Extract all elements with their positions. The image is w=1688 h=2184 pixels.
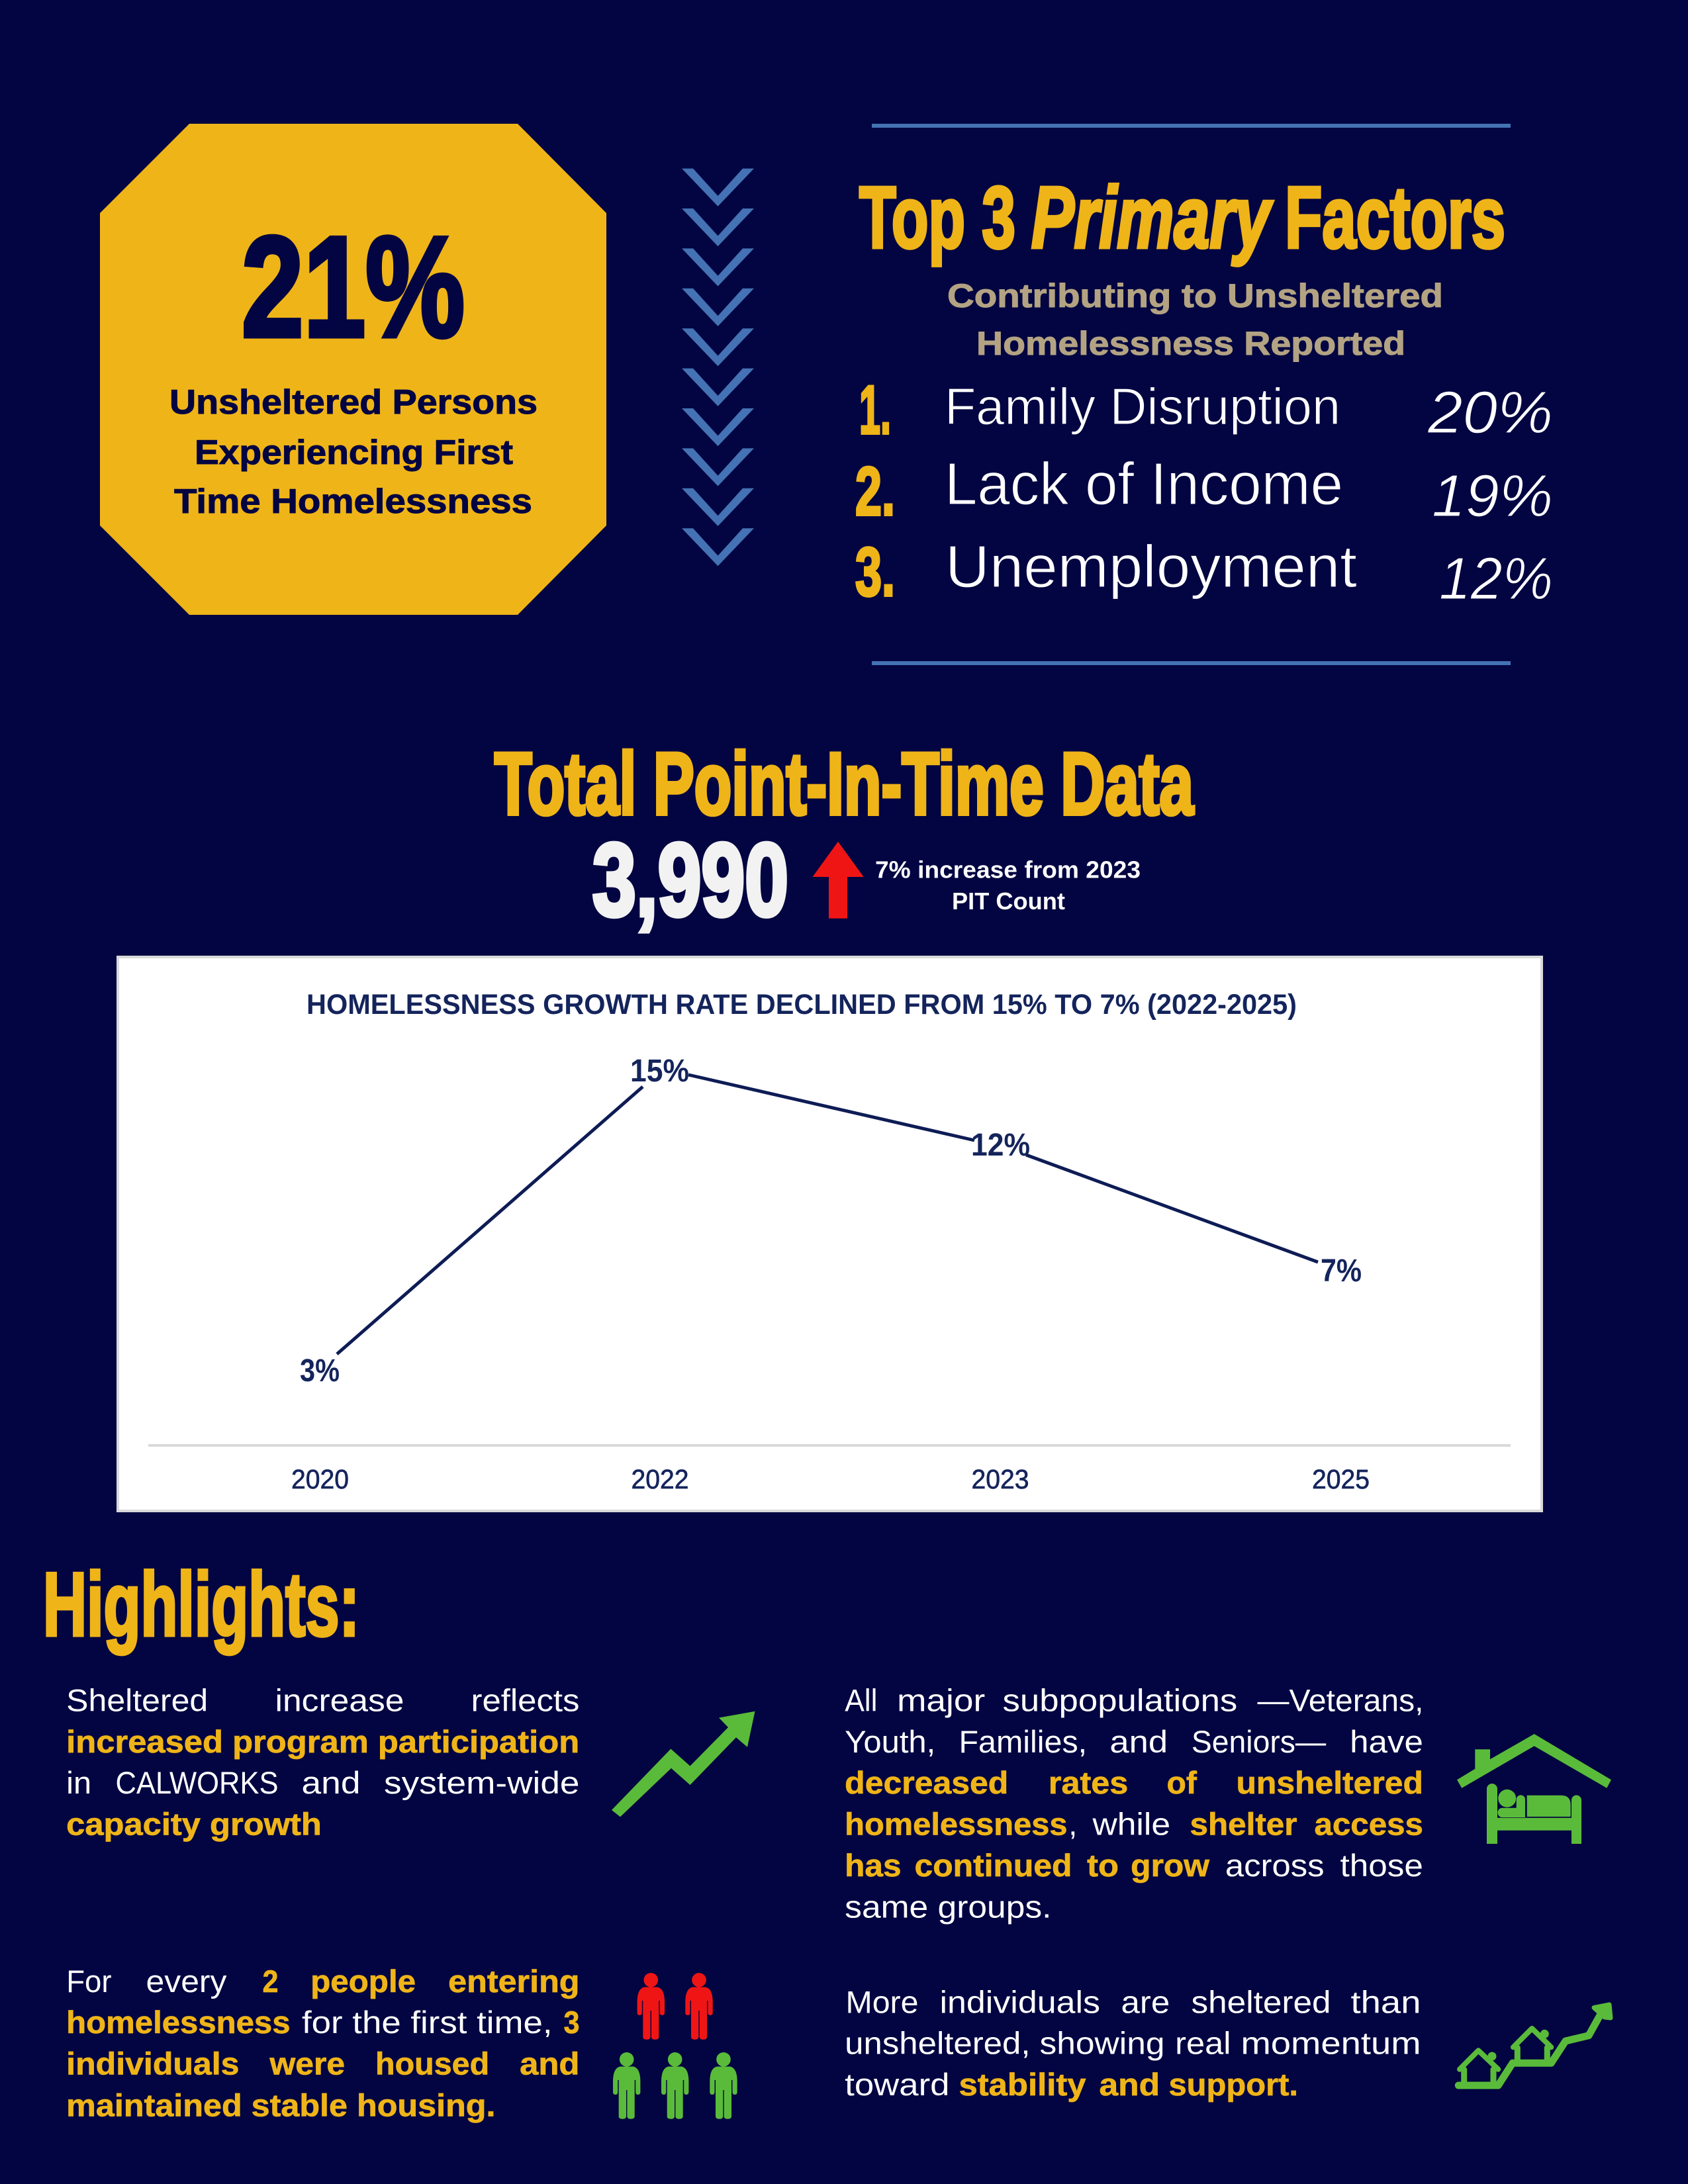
heading: top 3 primary factors xyxy=(859,169,1505,266)
heading: top 3 primary factors: Primary xyxy=(1031,169,1273,266)
year labels: 2020 xyxy=(291,1464,349,1494)
text block: major subpopulations: Families, xyxy=(959,1724,1087,1759)
data labels: 3% xyxy=(300,1353,340,1388)
text block: more individuals sheltered: showing xyxy=(1039,2026,1165,2061)
factor names: Unemployment xyxy=(945,534,1357,600)
factor percentages xyxy=(1427,380,1553,612)
text block: more individuals sheltered xyxy=(845,1984,1421,2102)
text block: sheltered increase: capacity growth xyxy=(66,1807,322,1842)
factor list numbers: 3. xyxy=(855,534,895,611)
text block: sheltered increase: CALWORKS xyxy=(115,1765,278,1800)
factor list numbers xyxy=(855,372,895,611)
data labels: 15% xyxy=(630,1054,689,1089)
panel: first-time homelessness stat xyxy=(100,124,606,615)
text block: 2 people entering, 3 housed: every xyxy=(146,1964,227,1999)
stat: 3,990: 3,990 xyxy=(592,823,788,938)
subheading: Homelessness Reported xyxy=(976,325,1405,362)
text block: major subpopulations: Seniors— xyxy=(1192,1724,1326,1759)
text block: major subpopulations: while xyxy=(1092,1807,1170,1842)
text block: major subpopulations: access xyxy=(1315,1807,1423,1842)
text block: more individuals sheltered: support. xyxy=(1169,2067,1298,2102)
text block: 2 people entering, 3 housed: housed xyxy=(375,2046,489,2081)
text block: 2 people entering, 3 housed: entering xyxy=(448,1964,580,1999)
text block: major subpopulations: same groups. xyxy=(845,1889,1051,1925)
text block: sheltered increase xyxy=(66,1682,579,1842)
stat description: Experiencing First xyxy=(195,433,513,472)
callout: 7% increase xyxy=(875,856,1141,915)
data labels: 7% xyxy=(1321,1253,1362,1289)
text block: 2 people entering, 3 housed: homelessness xyxy=(66,2005,290,2040)
factor names: Family Disruption xyxy=(945,377,1340,435)
text block: major subpopulations: —Veterans, xyxy=(1258,1682,1423,1718)
text block: more individuals sheltered: sheltered xyxy=(1192,1984,1331,2020)
text block: 2 people entering, 3 housed: and xyxy=(520,2046,580,2081)
factor names xyxy=(945,377,1357,600)
data labels xyxy=(300,1054,1362,1388)
year labels: 2022 xyxy=(632,1464,688,1494)
text block: 2 people entering, 3 housed: maintained stable housing. xyxy=(66,2087,495,2123)
factor list numbers: 1. xyxy=(859,372,891,449)
text block: major subpopulations: decreased xyxy=(845,1765,1008,1800)
factor percentages: 20% xyxy=(1427,380,1553,446)
text block: major subpopulations: subpopulations xyxy=(1002,1682,1237,1718)
stat description: Time Homelessness xyxy=(174,482,532,521)
data line xyxy=(337,1075,1318,1354)
text block: sheltered increase: system-wide xyxy=(384,1765,580,1800)
text block: 2 people entering, 3 housed: individuals xyxy=(66,2046,239,2081)
text block: major subpopulations: of xyxy=(1166,1765,1197,1800)
heading: top 3 primary factors: Top 3 xyxy=(859,169,1015,266)
text block: 2 people entering, 3 housed: 2 xyxy=(262,1964,278,1999)
text block: major subpopulations: Youth, xyxy=(845,1724,935,1759)
text block: more individuals sheltered: real xyxy=(1175,2026,1231,2061)
heading: top 3 primary factors: Factors xyxy=(1285,169,1505,266)
text block: 2 people entering, 3 housed: were xyxy=(269,2046,345,2081)
panel: top 3 primary factors xyxy=(855,124,1553,665)
text block: more individuals sheltered: than xyxy=(1350,1984,1421,2020)
text block: more individuals sheltered: and xyxy=(1099,2067,1160,2102)
text block: major subpopulations: grow xyxy=(1131,1848,1209,1883)
text block: major subpopulations: shelter xyxy=(1190,1807,1297,1842)
stat description xyxy=(169,383,538,521)
text block: sheltered increase: increased program participation xyxy=(66,1724,579,1759)
factor names: Lack of Income xyxy=(945,451,1343,518)
icon: two red people xyxy=(637,1973,713,2040)
icon: houses on rising arrow xyxy=(1458,2005,1611,2085)
text block: 2 people entering, 3 housed: people xyxy=(310,1964,416,1999)
stat: 21%: 21% xyxy=(242,206,465,367)
text block: 2 people entering, 3 housed: for the first time, xyxy=(302,2005,552,2040)
arrow: red increase arrow xyxy=(813,842,864,919)
icon: house with bed xyxy=(1457,1734,1611,1844)
text block: major subpopulations: to xyxy=(1087,1848,1119,1883)
text block: major subpopulations: major xyxy=(897,1682,985,1718)
text block: major subpopulations: unsheltered xyxy=(1237,1765,1423,1800)
heading: total point-in-time data: Total Point-In-Time Data xyxy=(494,735,1194,833)
factor percentages: 12% xyxy=(1439,546,1553,612)
subheading xyxy=(947,277,1443,362)
text block: sheltered increase: increase xyxy=(275,1682,404,1718)
text block: sheltered increase: and xyxy=(302,1765,360,1800)
text block: more individuals sheltered: stability xyxy=(959,2067,1086,2102)
text block: 2 people entering, 3 housed: For xyxy=(66,1964,111,1999)
text block: sheltered increase: in xyxy=(66,1765,91,1800)
text block: more individuals sheltered: More xyxy=(846,1984,919,2020)
year labels xyxy=(291,1464,1370,1494)
text block: more individuals sheltered: momentum xyxy=(1241,2026,1421,2061)
text block: 2 people entering, 3 housed: 3 xyxy=(564,2005,580,2040)
panel: line chart xyxy=(118,957,1542,1511)
callout: 7% increase: PIT Count xyxy=(952,887,1065,915)
data labels: 12% xyxy=(971,1128,1030,1163)
text block: major subpopulations xyxy=(845,1682,1423,1925)
text block: major subpopulations: All xyxy=(845,1682,878,1718)
text block: major subpopulations: and xyxy=(1109,1724,1168,1759)
text block: major subpopulations: continued xyxy=(915,1848,1072,1883)
year labels: 2023 xyxy=(972,1464,1029,1494)
text block: major subpopulations: those xyxy=(1340,1848,1423,1883)
text block: major subpopulations: rates xyxy=(1049,1765,1128,1800)
callout: 7% increase: 7% increase from 2023 xyxy=(875,856,1141,884)
text block: sheltered increase: Sheltered xyxy=(66,1682,208,1718)
factor list numbers: 2. xyxy=(855,453,895,530)
text block: major subpopulations: homelessness xyxy=(845,1807,1067,1842)
text block: more individuals sheltered: are xyxy=(1121,1984,1170,2020)
text block: major subpopulations: has xyxy=(845,1848,902,1883)
axis line xyxy=(148,1444,1511,1447)
text block: major subpopulations: across xyxy=(1225,1848,1324,1883)
chart title: HOMELESSNESS GROWTH RATE DECLINED FROM 15% TO 7% (2022-2025) xyxy=(306,989,1297,1021)
text block: sheltered increase: reflects xyxy=(471,1682,580,1718)
stat description: Unsheltered Persons xyxy=(169,383,538,422)
icon: green trend arrow xyxy=(612,1711,755,1817)
year labels: 2025 xyxy=(1312,1464,1370,1494)
heading: highlights: Highlights: xyxy=(43,1554,359,1655)
text block: major subpopulations: , xyxy=(1068,1807,1077,1842)
icon: three green people xyxy=(613,2052,737,2119)
text block: 2 people entering, 3 housed xyxy=(66,1964,579,2123)
text block: more individuals sheltered: unsheltered, xyxy=(845,2026,1030,2061)
text block: more individuals sheltered: individuals xyxy=(940,1984,1100,2020)
icon: column of chevrons xyxy=(682,169,754,566)
octagon background xyxy=(100,124,606,615)
text block: major subpopulations: have xyxy=(1350,1724,1423,1759)
subheading: Contributing to Unsheltered xyxy=(947,277,1443,314)
factor percentages: 19% xyxy=(1432,463,1553,529)
text block: more individuals sheltered: toward xyxy=(845,2067,949,2102)
